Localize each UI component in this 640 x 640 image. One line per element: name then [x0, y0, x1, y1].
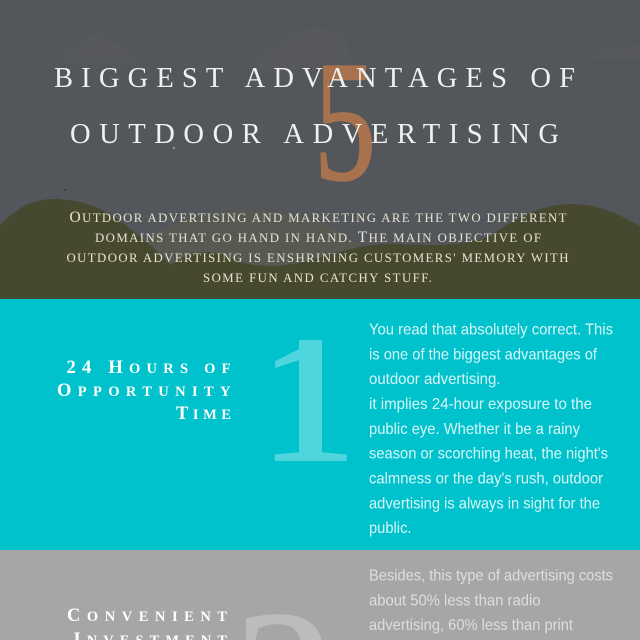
- clouds: [62, 28, 640, 70]
- intro text: OUTDOOR ADVERTISING IS ENSHRINING CUSTOMERS' MEMORY WITH: [66, 251, 568, 265]
- body text: public eye. Whether it be a rainy: [369, 421, 580, 438]
- title: OUTDOOR ADVERTISING: [70, 119, 559, 150]
- panel: advantage 2: [0, 550, 640, 640]
- big number 5: 5: [314, 27, 376, 217]
- body text: [369, 568, 613, 634]
- intro text: SOME FUN AND CATCHY STUFF.: [203, 271, 432, 285]
- title: [54, 63, 575, 150]
- body text: [369, 322, 613, 537]
- panel: advantage 1: [0, 299, 640, 550]
- intro text: OUTDOOR ADVERTISING AND MARKETING ARE THE TWO DIFFERENT: [70, 209, 567, 226]
- panel: header: [0, 0, 640, 300]
- intro text: [66, 209, 568, 285]
- heading: [67, 606, 227, 640]
- title: BIGGEST ADVANTAGES OF: [54, 63, 575, 94]
- body text: season or scorching heat, the night's: [369, 446, 608, 463]
- body text: it implies 24-hour exposure to the: [369, 396, 592, 413]
- body text: calmness or the day's rush, outdoor: [369, 470, 604, 488]
- body text: about 50% less than radio: [369, 592, 541, 609]
- heading: O PPORTUNITY: [57, 381, 231, 401]
- heading: C ONVENIENT: [67, 606, 227, 626]
- body text: advertising, 60% less than print: [369, 617, 574, 634]
- body text: is one of the biggest advantages of: [369, 346, 598, 363]
- intro text: DOMAINS THAT GO HAND IN HAND. THE MAIN OBJECTIVE OF: [95, 229, 541, 246]
- body text: Besides, this type of advertising costs: [369, 568, 613, 584]
- heading: [57, 358, 231, 424]
- icon: dot and bird: [57, 147, 175, 200]
- big number 1: 1: [258, 301, 358, 499]
- heading: 24 H OURS OF: [66, 358, 231, 378]
- hills: [0, 199, 640, 300]
- body text: public.: [369, 520, 412, 537]
- body text: outdoor advertising.: [369, 371, 500, 388]
- body text: You read that absolutely correct. This: [369, 322, 613, 338]
- body text: advertising is always in sight for the: [369, 495, 600, 512]
- heading: T IME: [176, 404, 231, 424]
